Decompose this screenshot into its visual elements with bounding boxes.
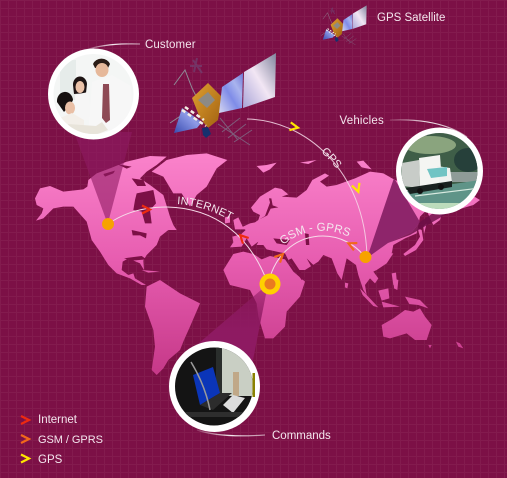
photo: customer [48,48,139,140]
legend: internet: Internet [38,414,78,426]
arc: gps [247,119,367,257]
satellite: small [321,5,367,45]
leader: customer [86,44,140,50]
arc: gsm [268,236,366,284]
label: gsm: GSM - GPRS [280,222,350,244]
label: gps satellite: GPS Satellite [377,12,445,24]
beam: commands [185,284,268,365]
eurasia [230,172,480,295]
arrows: gps [289,122,362,193]
seas [259,198,315,280]
photo: commands [169,341,260,432]
arrows: gsm [274,240,357,263]
label: vehicles: Vehicles [340,115,384,127]
world map [35,153,480,375]
photo: vehicles [396,128,483,214]
satellite: large [170,53,276,145]
marker: vehicles [360,251,372,263]
marker: commands [260,274,280,294]
arc: internet [108,207,268,284]
label: customer: Customer [145,39,196,51]
africa [223,252,305,338]
leader: vehicles [390,120,467,137]
legend: gps: GPS [38,454,63,466]
legend: gsm: GSM / GPRS [38,434,103,446]
beam: customer [74,132,132,224]
hudson bay and channels [103,164,156,238]
label: commands: Commands [272,430,331,442]
marker: customer [102,218,114,230]
leader: commands [197,430,265,436]
arrows: internet [142,206,249,244]
label: gps: GPS [322,148,342,168]
legend [21,414,103,466]
beam: vehicles [367,178,420,258]
beam: vehicles shadow [388,205,450,243]
label: internet: INTERNET [178,196,234,219]
